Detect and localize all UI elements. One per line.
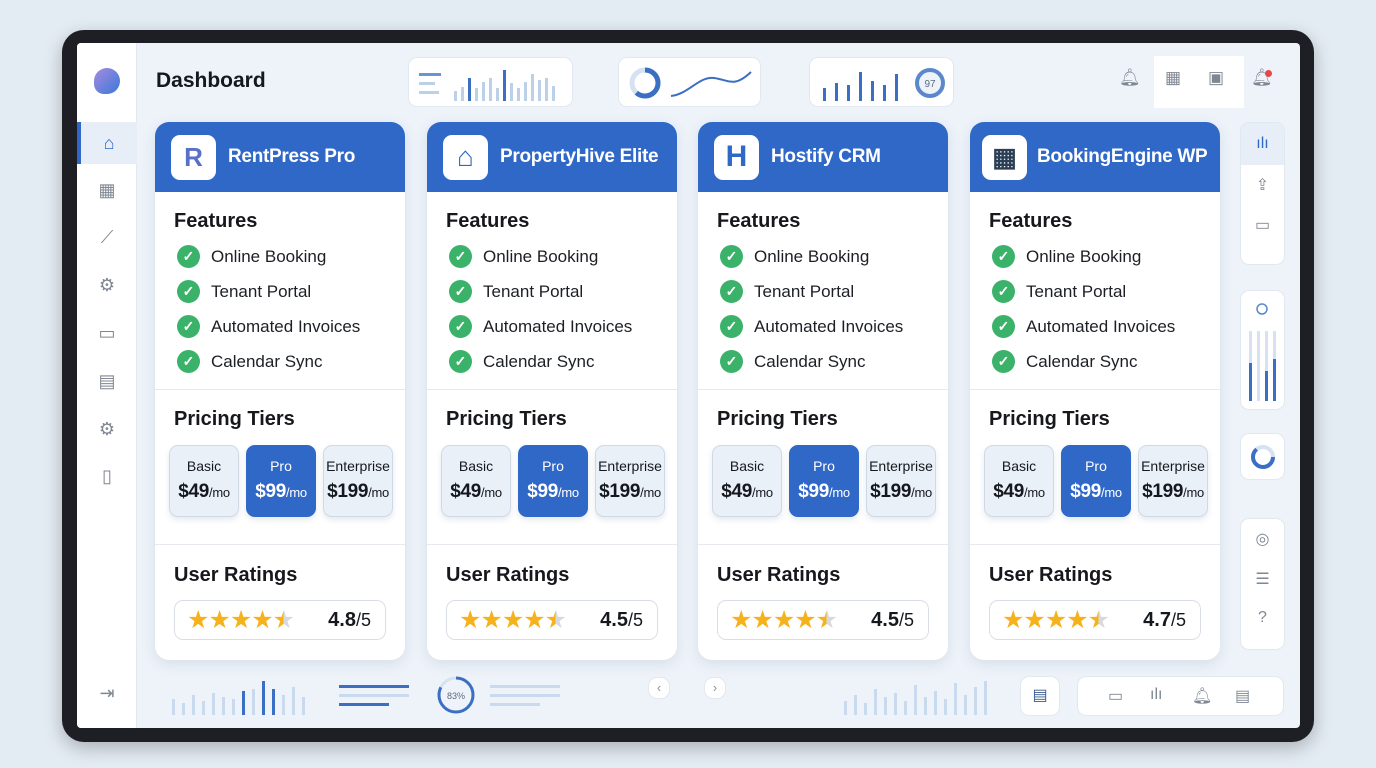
- card: RentPress Pro: Enterprise: [326, 458, 390, 474]
- title: Dashboard: [156, 69, 266, 92]
- card: BookingEngine WP: Automated Invoices: [1026, 316, 1175, 336]
- card: PropertyHive Elite: Pricing Tiers: [446, 408, 567, 430]
- top icons: [1119, 56, 1273, 108]
- card: BookingEngine WP: ✓: [998, 318, 1009, 334]
- bottom: pager arrows: ›: [713, 680, 717, 695]
- right panel: chart: [1240, 290, 1285, 410]
- card: PropertyHive Elite: Calendar Sync: [483, 352, 595, 370]
- bottom: right sparkline: [844, 681, 987, 715]
- card: Hostify CRM: ✓: [726, 248, 737, 264]
- card: Hostify CRM: ✓: [726, 318, 737, 334]
- sidebar: [77, 43, 137, 728]
- right panel: tools: [1240, 122, 1285, 265]
- card: RentPress Pro: 4.8/5: [328, 608, 371, 630]
- card: RentPress Pro: ✓: [183, 353, 194, 369]
- top icons: 🔔︎: [1251, 68, 1273, 87]
- card: BookingEngine WP: ★★★★★: [1002, 606, 1109, 634]
- top widget: bars: [408, 57, 573, 107]
- top icons: ▦: [1165, 68, 1181, 87]
- card: RentPress Pro: Online Booking: [211, 246, 326, 266]
- right panel: icons: ?: [1258, 609, 1267, 626]
- card: BookingEngine WP: BookingEngine WP: [1037, 146, 1207, 167]
- card: Hostify CRM: User Ratings: [717, 564, 840, 586]
- card: PropertyHive Elite: $49/mo: [450, 481, 502, 502]
- card: PropertyHive Elite: ✓: [455, 283, 466, 299]
- bottom: 83% donut: [438, 676, 560, 714]
- bottom: icon toolbar: 🔔︎: [1192, 688, 1212, 705]
- card: Hostify CRM: H: [726, 140, 747, 173]
- card: BookingEngine WP: Tenant Portal: [1026, 282, 1126, 300]
- card: RentPress Pro: ★★★★★: [187, 606, 294, 634]
- top widget: bars score: 97: [924, 79, 936, 90]
- card: BookingEngine WP: [970, 122, 1220, 660]
- card: Hostify CRM: Basic: [730, 458, 764, 474]
- card: RentPress Pro: [155, 122, 405, 660]
- nav icons: [98, 180, 116, 703]
- header: RentPress Pro: [228, 146, 355, 167]
- nav icons: ▯: [102, 466, 112, 486]
- top widget: bars score: [809, 57, 954, 107]
- card: Hostify CRM: Online Booking: [754, 246, 869, 266]
- card: Hostify CRM: Hostify CRM: [771, 146, 881, 167]
- card: PropertyHive Elite: Enterprise: [598, 458, 662, 474]
- card: Hostify CRM: Features: [717, 210, 800, 232]
- bottom: pager arrows: ‹: [657, 680, 661, 695]
- right panel: icons: ☰: [1255, 571, 1270, 588]
- card: PropertyHive Elite: Automated Invoices: [483, 316, 632, 336]
- bottom: icon toolbar: ▭: [1108, 688, 1123, 705]
- card: BookingEngine WP: 4.7/5: [1143, 608, 1186, 630]
- card: Hostify CRM: Calendar Sync: [754, 352, 866, 370]
- nav icons: ⇥: [99, 683, 115, 703]
- bottom: list lines: [339, 685, 409, 706]
- right panel: tools: ılı: [1256, 135, 1269, 152]
- card: BookingEngine WP: Features: [989, 210, 1072, 232]
- card: PropertyHive Elite: User Ratings: [446, 564, 569, 586]
- bottom: icon toolbar: ▤: [1235, 688, 1250, 705]
- card: Hostify CRM: ✓: [726, 283, 737, 299]
- nav active: home: ⌂: [104, 133, 114, 153]
- card: Hostify CRM: ✓: [726, 353, 737, 369]
- card: RentPress Pro: Tenant Portal: [211, 282, 311, 300]
- card: Hostify CRM: ★★★★★: [730, 606, 837, 634]
- card: PropertyHive Elite: $99/mo: [527, 481, 579, 502]
- nav icons: ▭: [98, 323, 116, 343]
- card: PropertyHive Elite: ✓: [455, 353, 466, 369]
- card: BookingEngine WP: ✓: [998, 248, 1009, 264]
- top icons: ▣: [1208, 68, 1224, 87]
- card: RentPress Pro: Features: [174, 210, 257, 232]
- card: Hostify CRM: Automated Invoices: [754, 316, 903, 336]
- right panel: donut: [1240, 433, 1285, 480]
- right panel: icons: ◎: [1256, 531, 1269, 548]
- card: BookingEngine WP: ✓: [998, 353, 1009, 369]
- card: Hostify CRM: Tenant Portal: [754, 282, 854, 300]
- card: PropertyHive Elite: Basic: [459, 458, 493, 474]
- card: BookingEngine WP: Online Booking: [1026, 246, 1141, 266]
- bottom: bar sparkline: [172, 681, 305, 715]
- bottom: pager arrows: [648, 677, 726, 699]
- card: PropertyHive Elite: ⌂: [457, 141, 474, 172]
- card: Hostify CRM: $49/mo: [721, 481, 773, 502]
- nav active: home: [77, 122, 137, 164]
- nav icons: ⟋: [101, 227, 113, 247]
- card: RentPress Pro: $199/mo: [327, 481, 389, 502]
- card: RentPress Pro: Calendar Sync: [211, 352, 323, 370]
- card: PropertyHive Elite: ★★★★★: [459, 606, 566, 634]
- card: Hostify CRM: $199/mo: [870, 481, 932, 502]
- card: BookingEngine WP: Pro: [1085, 458, 1107, 474]
- card: RentPress Pro: ✓: [183, 283, 194, 299]
- card: PropertyHive Elite: Online Booking: [483, 246, 598, 266]
- card: PropertyHive Elite: ✓: [455, 318, 466, 334]
- header: R: [184, 142, 203, 172]
- right panel: icons: [1240, 518, 1285, 650]
- card: RentPress Pro: $49/mo: [178, 481, 230, 502]
- nav icons: ⚙: [99, 275, 115, 295]
- icon: logo: [94, 68, 120, 94]
- card: BookingEngine WP: Basic: [1002, 458, 1036, 474]
- header: [155, 122, 405, 192]
- top widget: donut line: [618, 57, 761, 107]
- card: RentPress Pro: Automated Invoices: [211, 316, 360, 336]
- card: BookingEngine WP: ✓: [998, 283, 1009, 299]
- card: Hostify CRM: 4.5/5: [871, 608, 914, 630]
- nav icons: ▤: [98, 371, 116, 391]
- card: BookingEngine WP: $49/mo: [993, 481, 1045, 502]
- card: RentPress Pro: Pro: [270, 458, 292, 474]
- card: RentPress Pro: $99/mo: [255, 481, 307, 502]
- card: PropertyHive Elite: PropertyHive Elite: [500, 146, 658, 167]
- card: BookingEngine WP: Pricing Tiers: [989, 408, 1110, 430]
- card: BookingEngine WP: ▦: [992, 142, 1017, 172]
- card: PropertyHive Elite: [427, 122, 677, 660]
- card: Hostify CRM: Pro: [813, 458, 835, 474]
- bottom: widget icon: ▤: [1032, 687, 1048, 704]
- card: BookingEngine WP: Enterprise: [1141, 458, 1205, 474]
- screen: [77, 43, 1300, 728]
- nav icons: ▦: [98, 180, 116, 200]
- card: PropertyHive Elite: Features: [446, 210, 529, 232]
- top icons: 🔔︎: [1119, 68, 1141, 87]
- card: BookingEngine WP: User Ratings: [989, 564, 1112, 586]
- card: BookingEngine WP: Calendar Sync: [1026, 352, 1138, 370]
- card: PropertyHive Elite: $199/mo: [599, 481, 661, 502]
- card: PropertyHive Elite: Pro: [542, 458, 564, 474]
- bottom: icon toolbar: [1077, 676, 1284, 716]
- card: RentPress Pro: Basic: [187, 458, 221, 474]
- card: Hostify CRM: Pricing Tiers: [717, 408, 838, 430]
- card: BookingEngine WP: $199/mo: [1142, 481, 1204, 502]
- bottom: icon toolbar: ılı: [1150, 686, 1162, 703]
- card: Hostify CRM: $99/mo: [798, 481, 850, 502]
- card: RentPress Pro: ✓: [183, 248, 194, 264]
- card: RentPress Pro: User Ratings: [174, 564, 297, 586]
- card: PropertyHive Elite: 4.5/5: [600, 608, 643, 630]
- card: Hostify CRM: [698, 122, 948, 660]
- card: RentPress Pro: ✓: [183, 318, 194, 334]
- card: BookingEngine WP: $99/mo: [1070, 481, 1122, 502]
- card: RentPress Pro: Pricing Tiers: [174, 408, 295, 430]
- nav icons: ⚙: [99, 419, 115, 439]
- card: Hostify CRM: Enterprise: [869, 458, 933, 474]
- right panel: tools: ⇪: [1256, 177, 1269, 194]
- bottom: widget icon: [1020, 676, 1060, 716]
- bottom: 83% donut: 83%: [447, 691, 465, 701]
- right panel: tools: ▭: [1255, 217, 1270, 234]
- card: PropertyHive Elite: Tenant Portal: [483, 282, 583, 300]
- card: PropertyHive Elite: ✓: [455, 248, 466, 264]
